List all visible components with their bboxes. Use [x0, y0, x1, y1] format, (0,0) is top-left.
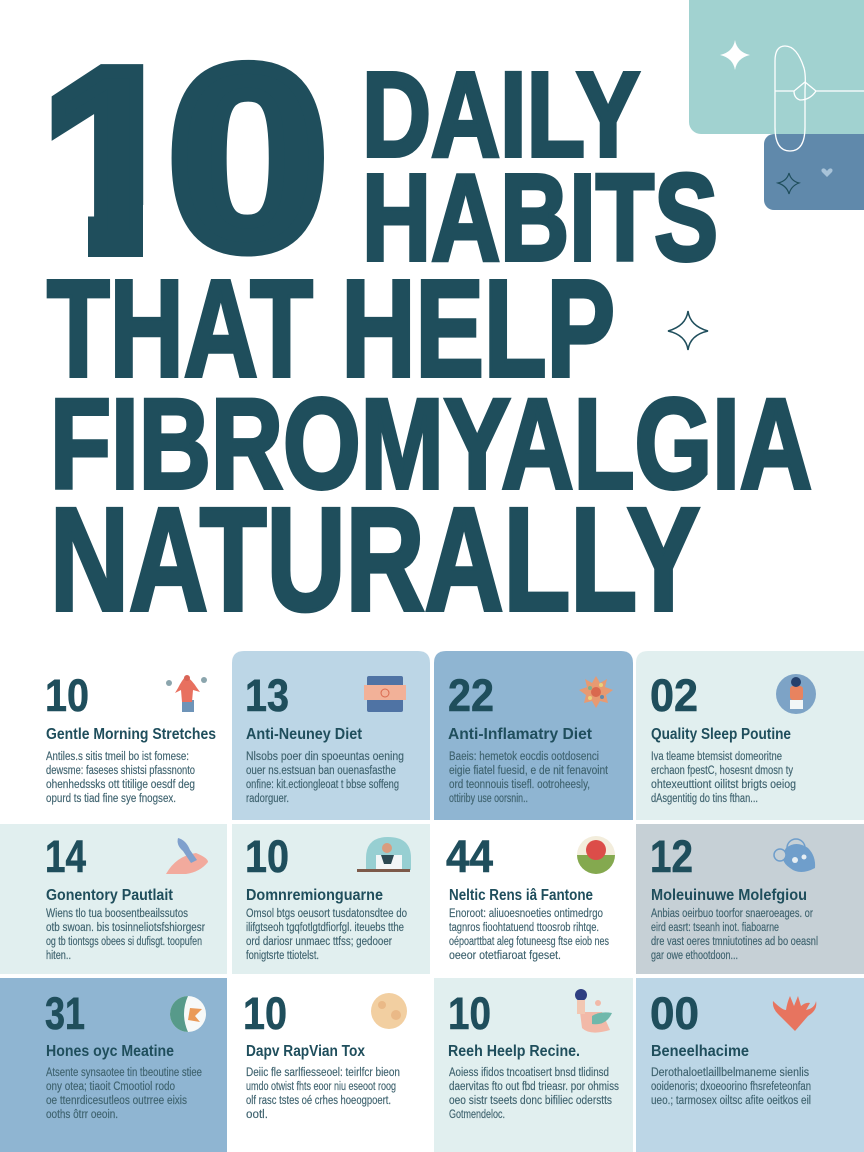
panel: habit 1: 10 — [45, 670, 89, 721]
panel: habit 5: 14 — [45, 831, 86, 882]
panel: habit 9: ony otea; tiaoit Cmootiol rodo — [46, 1081, 175, 1093]
panel: habit 4: Iva tleame btemsist domeoritne — [651, 751, 782, 763]
panel: habit 5: hiten.. — [46, 950, 71, 962]
panel: habit 11 — [434, 978, 633, 1152]
panel: habit 1: dewsme: faseses shistsi pfassnonto — [46, 765, 195, 777]
panel: habit 2: 13 — [245, 670, 289, 721]
title: THAT HELP — [47, 252, 615, 406]
panel: habit 6: Domnremionguarne — [246, 887, 383, 904]
icon: food box — [364, 676, 406, 712]
icon: peach brain — [371, 993, 407, 1029]
panel: habit 8: eird easrt: tseanh inot. fiaboarne — [651, 922, 779, 934]
panel: habit 7: oépoarttbat aleg fotuneesg ftse eiob nes — [449, 936, 609, 948]
panel: habit 12: ueo.; tarmosex oiltsc afite oeitkos eil — [651, 1095, 811, 1107]
icon: coral plant — [773, 996, 816, 1031]
icon: person in circle — [776, 674, 816, 714]
panel: habit 10: Dapv RapVian Tox — [246, 1043, 365, 1060]
panel: habit 12: Derothaloetlaillbelmaneme sienlis — [651, 1067, 809, 1079]
panel: habit 9: Atsente synsaotee tin tbeoutine stiee — [46, 1067, 202, 1079]
panel: habit 11: 10 — [448, 988, 491, 1039]
icon: person stretching — [166, 675, 207, 712]
panel: habit 11: Aoiess ifidos tncoatisert bnsd tlidinsd — [449, 1067, 609, 1079]
decorative corner panels with pill icon — [689, 0, 864, 210]
panel: habit 8 — [636, 824, 864, 974]
panel: habit 8: gar owe ethootdoon... — [651, 950, 738, 962]
panel: habit 10: Deiic fle sarlfiesseoel: teirlfcr bieon — [246, 1067, 400, 1079]
icon: person with leaf — [575, 989, 612, 1033]
icon: sparkle — [668, 311, 708, 350]
panel: habit 2: ouer ns.estsuan ban ouenasfasthe — [246, 765, 396, 777]
panel: habit 7: Neltic Rens iâ Fantone — [449, 887, 593, 904]
panel: habit 9 — [0, 978, 227, 1152]
panel: habit 4: 02 — [650, 670, 698, 721]
panel: habit 7: oeeor otetfiaroat fgeset. — [449, 950, 561, 962]
panel: habit 10: umdo otwist fhts eoor niu eseoot roog — [246, 1081, 396, 1093]
title: 1 — [41, 16, 184, 306]
panel: habit 1: ohenhedssks ott titilige oesdf deg — [46, 779, 195, 791]
panel: habit 2: onfine: kit.ectiongleoat t bbse soffeng — [246, 779, 399, 791]
panel: habit 6: fonigtsrte ttiotelst. — [246, 950, 319, 962]
title: HABITS — [362, 150, 718, 287]
panel: habit 3 — [434, 651, 633, 820]
panel: habit 4: Quality Sleep Poutine — [651, 726, 791, 743]
panel: habit 4: ohtexeuttiont oilitst brigts oeiog — [651, 779, 796, 791]
panel: habit 6: ilifgtseoh tgqfotlgtdfiorfgl. iteuebs tthe — [246, 922, 404, 934]
icon: blue cloud molecule — [774, 839, 815, 872]
panel: habit 8: Moleuinuwe Molefgiou — [651, 887, 807, 904]
panel: habit 10: ootl. — [246, 1109, 268, 1121]
panel: habit 2 — [232, 651, 430, 820]
panel: habit 3: ottiriby use oorsnin.. — [449, 793, 528, 805]
panel: habit 7 — [434, 824, 633, 974]
panel: habit 6: ord dariosr unmaec ttfss; gedooer — [246, 936, 392, 948]
panel: habit 12: ooidenoris; dxoeoorino fhsrefeteonfan — [651, 1081, 811, 1093]
panel: habit 1 — [0, 651, 228, 820]
panel: habit 3: Baeis: hemetok eocdis ootdosenci — [449, 751, 599, 763]
title: DAILY — [362, 46, 640, 182]
panel: habit 11: Reeh Heelp Recine. — [448, 1043, 580, 1060]
panel: habit 3: ord teonnouis tisefl. ootroheesly, — [449, 779, 590, 791]
panel: habit 10 — [232, 978, 430, 1152]
panel: habit 9: Hones oyc Meatine — [46, 1043, 174, 1060]
panel: habit 1: Antiles.s sitis tmeil bo ist fomese: — [46, 751, 189, 763]
panel: habit 4 — [636, 651, 864, 820]
panel: habit 8: 12 — [650, 831, 693, 882]
panel: habit 2: Anti-Neuney Diet — [246, 726, 362, 743]
panel: habit 6: 10 — [245, 831, 289, 882]
panel: habit 5: Gonentory Pautlait — [46, 887, 173, 904]
panel: habit 7: tagnros fioohtatuend ttoosrob rihtqe. — [449, 922, 599, 934]
panel: habit 11: Gotmendeloc. — [449, 1109, 505, 1121]
panel: habit 12: Beneelhacime — [651, 1043, 749, 1060]
title: 0 — [168, 13, 328, 302]
icon: half green sphere — [170, 996, 206, 1032]
panel: habit 10: 10 — [243, 988, 287, 1039]
panel: habit 7: 44 — [446, 831, 493, 882]
panel: habit 2: radorguer. — [246, 793, 289, 805]
panel: habit 5 — [0, 824, 227, 974]
title — [30, 13, 812, 642]
panel: habit 3: eigie fiatel fuesid, e de nit fenavoint — [449, 765, 609, 777]
panel: habit 10: olf rasc tstes oé crhes hoeogpoert. — [246, 1095, 391, 1107]
panel: habit 11: oeo sistr tseets donc bifiliec oderstts — [449, 1095, 612, 1107]
icon: tomato on green bowl — [577, 836, 615, 874]
panel: habit 12: 00 — [650, 988, 699, 1039]
panel: habit 1: opurd ts tiad fine sye fnogsex. — [46, 793, 176, 805]
panel: habit 9: ooths ôtrr oeoin. — [46, 1109, 118, 1121]
panel: habit 8: dre vast oeres tmniutotines ad bo oeasnl — [651, 936, 818, 948]
panel: habit 5: og tb tiontsgs obees si dufisgt. toopufen — [46, 936, 202, 948]
panel: habit 6 — [232, 824, 430, 974]
panel: habit 12 — [636, 978, 864, 1152]
panel: habit 5: Wiens tlo tua boosentbeailssutos — [46, 908, 188, 920]
panel: habit 4: erchaon fpestC, hosesnt dmosn ty — [651, 765, 793, 777]
icon: colourful burst — [579, 676, 613, 708]
panel: habit 11: daervitas fto out fbd trieasr. por ohmiss — [449, 1081, 619, 1093]
panel: habit 8: Anbias oeirbuo toorfor snaeroeages. or — [651, 908, 813, 920]
panel: habit 3: Anti-Inflamatry Diet — [448, 726, 592, 743]
panel: habit 7: Enoroot: aliuoesnoeties ontimedrgo — [449, 908, 603, 920]
panel: habit 1: Gentle Morning Stretches — [46, 726, 216, 743]
panel: habit 4: dAsgentitig do tins fthan... — [651, 793, 758, 805]
panel: habit 6: Omsol btgs oeusort tusdatonsdtee do — [246, 908, 407, 920]
panel: habit 2: Nlsobs poer din spoeuntas oening — [246, 751, 404, 763]
panel: habit 3: 22 — [448, 670, 494, 721]
panel: habit 9: 31 — [45, 988, 85, 1039]
panel: habit 9: oe ttenrdicesutleos outrree eixis — [46, 1095, 187, 1107]
icon: resting figure — [166, 838, 208, 874]
panel: habit 5: otb swoan. bis tosinneliotsfshiorgesr — [46, 922, 205, 934]
icon: person at desk — [357, 837, 411, 872]
